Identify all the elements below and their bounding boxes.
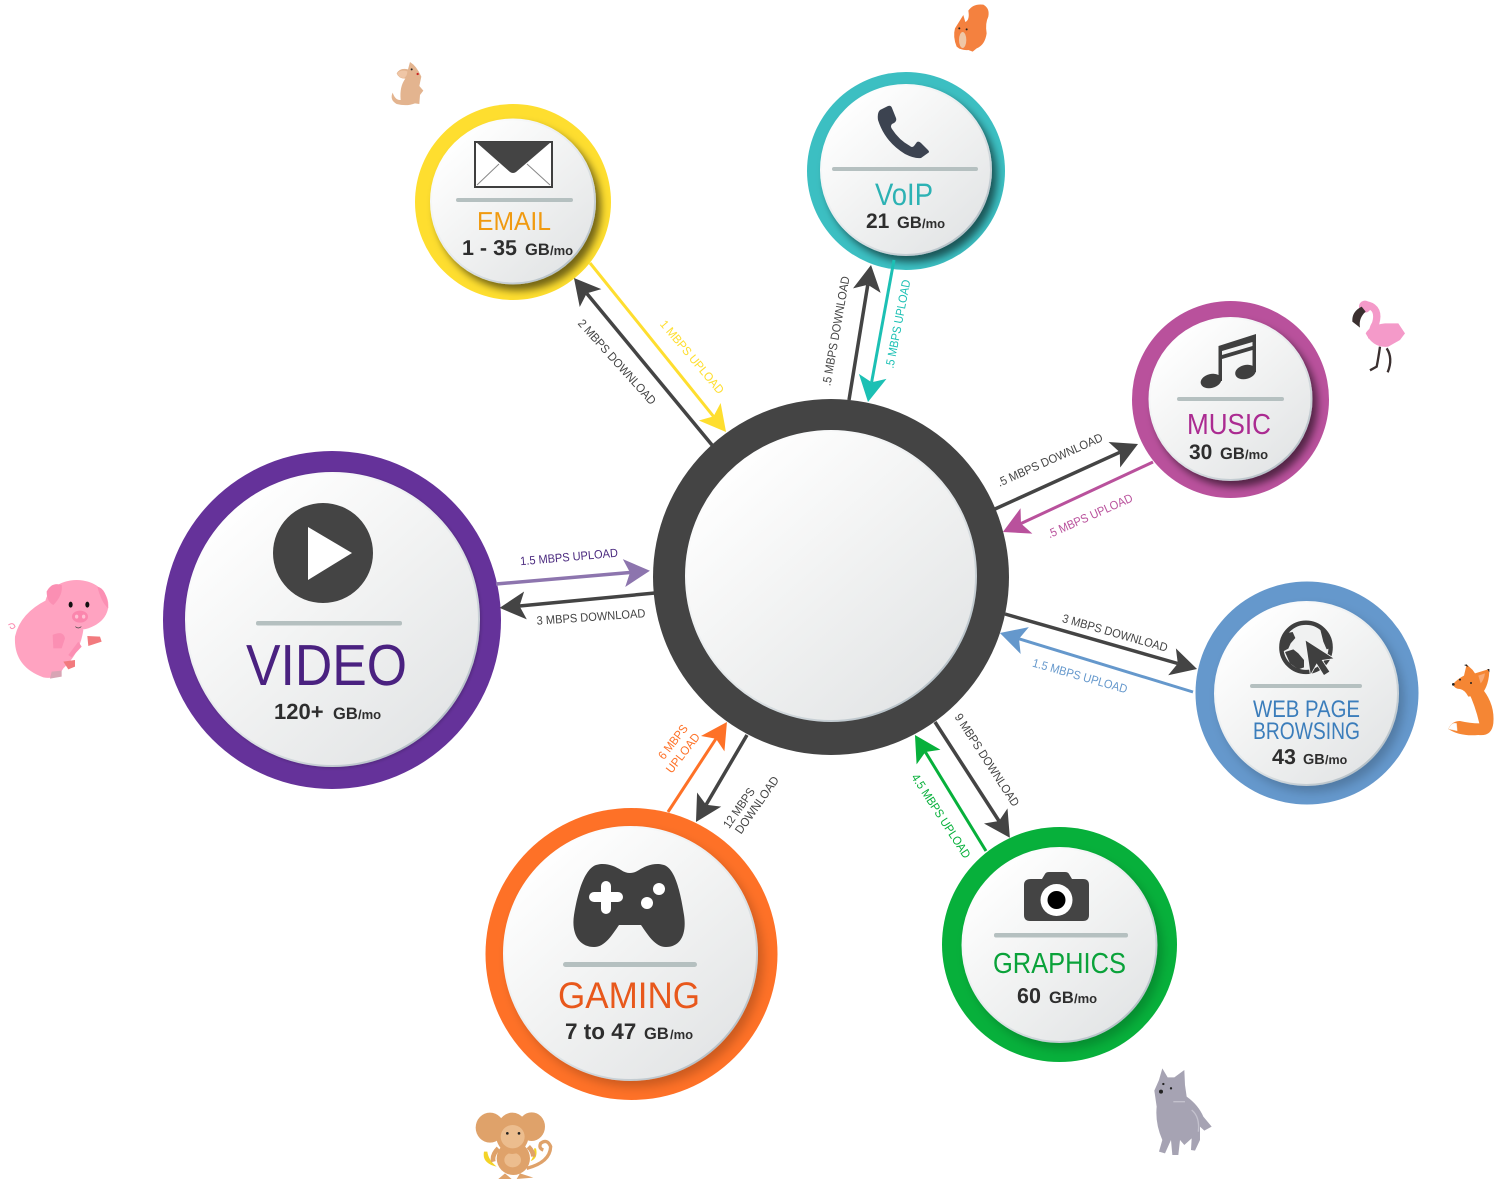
icon: squirrel (954, 4, 989, 52)
stat: gaming: GB (644, 1025, 669, 1043)
icon: wolf (1154, 1068, 1212, 1155)
panel: video (163, 451, 501, 789)
arrow: email download (575, 293, 712, 445)
arrow: web upload (1019, 639, 1193, 696)
arrow: email upload (590, 263, 727, 416)
heading: music: MUSIC (1187, 409, 1271, 441)
arrow: web upload: 1.5 MBPS UPLOAD (1031, 656, 1129, 696)
divider: email (456, 198, 573, 202)
arrow: gaming upload (655, 722, 716, 812)
arrow: video upload (496, 546, 630, 584)
arrow: gaming download: 12 MBPS (720, 785, 758, 831)
icon: fox (1448, 664, 1494, 735)
arrow: email download: 2 MBPS DOWNLOAD (575, 316, 659, 408)
stat: web: 43 (1272, 745, 1296, 769)
panel: email (415, 104, 611, 300)
arrow: graphics download: 9 MBPS DOWNLOAD (952, 711, 1022, 809)
stat: video: /mo (358, 707, 381, 722)
heading: video: VIDEO (246, 633, 407, 698)
stat: gaming: /mo (670, 1027, 693, 1042)
arrow: music upload: .5 MBPS UPLOAD (1045, 491, 1135, 541)
stat: music: /mo (1245, 447, 1268, 462)
arrow: VoIP upload (872, 260, 914, 382)
heading: email: EMAIL (477, 206, 551, 236)
stat: web: GB (1303, 752, 1325, 768)
icon: globe and cursor (1281, 623, 1333, 675)
icon: play button (273, 503, 373, 603)
stat: graphics: 60 (1017, 984, 1041, 1008)
arrow: web download (1005, 611, 1178, 664)
arrow: gaming upload: UPLOAD (663, 730, 703, 776)
stat: VoIP: /mo (922, 216, 945, 231)
divider: gaming (563, 962, 697, 967)
heading: graphics: GRAPHICS (993, 948, 1126, 980)
arrow: gaming download: DOWNLOAD (732, 773, 782, 836)
stat: web: /mo (1325, 753, 1348, 767)
arrow: web download: 3 MBPS DOWNLOAD (1061, 611, 1170, 655)
panel: web page browsing (1196, 582, 1418, 804)
arrow: music upload (1021, 462, 1153, 541)
stat: VoIP: GB (897, 214, 922, 232)
icon: monkey (476, 1112, 551, 1179)
divider: VoIP (832, 167, 978, 171)
stat: graphics: /mo (1074, 991, 1097, 1006)
icon: pig (8, 580, 108, 679)
arrow: gaming upload: 6 MBPS (655, 722, 691, 762)
heading: web page browsing (1253, 696, 1360, 745)
arrow: VoIP download (819, 275, 868, 400)
stat: email: GB (525, 241, 550, 259)
icon: game controller (573, 864, 685, 947)
arrow: music download: .5 MBPS DOWNLOAD (995, 430, 1105, 490)
icon: camera (1024, 872, 1089, 921)
arrow: music download (995, 430, 1120, 509)
arrow: VoIP download: .5 MBPS DOWNLOAD (819, 275, 853, 387)
stat: email: /mo (550, 243, 573, 258)
arrow: video download (520, 593, 655, 628)
heading: VoIP: VoIP (875, 177, 933, 212)
icon: flamingo (1352, 301, 1405, 372)
icon: phone (878, 106, 929, 158)
heading: gaming: GAMING (558, 975, 700, 1016)
divider: music (1177, 397, 1284, 401)
divider: video (256, 621, 402, 626)
arrow: video upload: 1.5 MBPS UPLOAD (520, 546, 619, 568)
icon: mouse (392, 62, 423, 105)
icon: envelope (475, 142, 552, 187)
panel: central hub (653, 399, 1009, 755)
stat: gaming: 7 to 47 (565, 1019, 636, 1044)
arrow: VoIP upload: .5 MBPS UPLOAD (883, 278, 914, 370)
panel: music (1132, 301, 1329, 498)
stat: video: 120+ (274, 699, 324, 724)
stat: video: GB (333, 705, 358, 723)
arrow: graphics upload: 4.5 MBPS UPLOAD (908, 771, 974, 861)
icon: music notes (1199, 334, 1257, 390)
arrow: email upload: 1 MBPS UPLOAD (657, 317, 727, 397)
divider: graphics (994, 933, 1128, 938)
stat: music: 30 (1189, 441, 1212, 464)
stat: email: 1 - 35 (462, 236, 517, 260)
divider: web (1250, 684, 1362, 688)
stat: music: GB (1220, 445, 1245, 463)
stat: VoIP: 21 (866, 210, 890, 233)
heading: web page browsing: BROWSING (1253, 718, 1360, 745)
panel: gaming (486, 808, 778, 1100)
panel: graphics (942, 827, 1177, 1062)
panel: VoIP (807, 72, 1005, 270)
heading: web page browsing: WEB PAGE (1253, 696, 1360, 723)
stat: graphics: GB (1049, 989, 1074, 1007)
arrow: gaming download (706, 735, 782, 836)
arrow: video download: 3 MBPS DOWNLOAD (536, 606, 646, 628)
